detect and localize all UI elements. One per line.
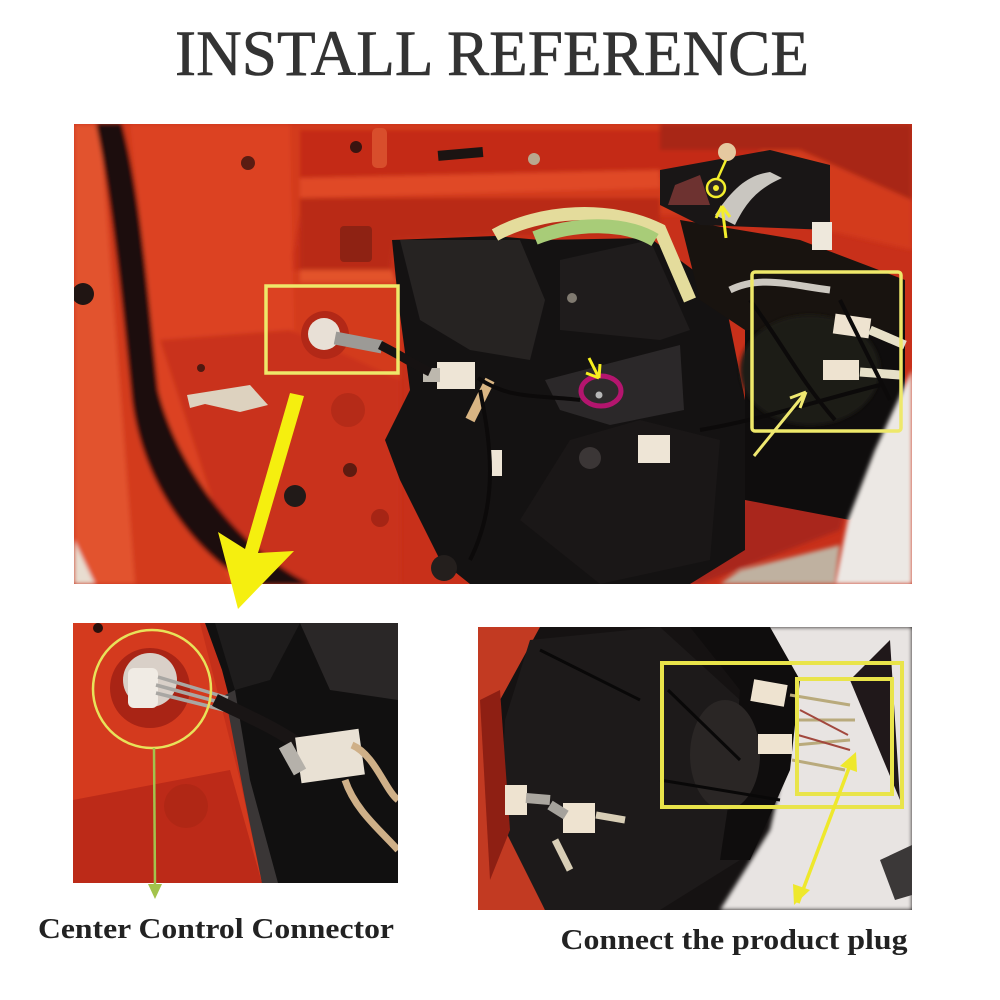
door latch bbox=[187, 385, 268, 412]
white plug near handle bbox=[812, 222, 832, 250]
yellow annotation boxes bbox=[662, 663, 902, 807]
arrow: big yellow arrow bbox=[218, 393, 304, 609]
black module bbox=[385, 236, 745, 584]
annotation circle bbox=[93, 630, 211, 748]
black wiring bbox=[470, 300, 890, 560]
small plum ring bbox=[581, 376, 621, 406]
white connectors bbox=[833, 314, 871, 338]
photo: center control connector close-up bbox=[73, 623, 398, 883]
yellow highlight boxes bbox=[266, 286, 398, 373]
caption: center control connector: Center Control Connector bbox=[38, 913, 394, 945]
door handle bbox=[660, 150, 830, 230]
dark rubber seal bbox=[96, 124, 310, 584]
yellow small annotations bbox=[754, 392, 806, 456]
caption: connect the product plug: Connect the product plug bbox=[560, 924, 908, 956]
title: INSTALL REFERENCE bbox=[175, 18, 809, 90]
foam strips bbox=[495, 214, 690, 300]
seat foam bbox=[835, 370, 912, 584]
photo: main car door interior bbox=[72, 124, 912, 584]
photo: product plug close-up bbox=[478, 627, 912, 910]
silver cable bbox=[730, 282, 830, 290]
arrow: thin green pointer to label bbox=[148, 748, 162, 899]
center connector in photo bbox=[301, 311, 349, 359]
double arrow bbox=[798, 760, 852, 903]
holes and bolts bbox=[350, 141, 362, 153]
